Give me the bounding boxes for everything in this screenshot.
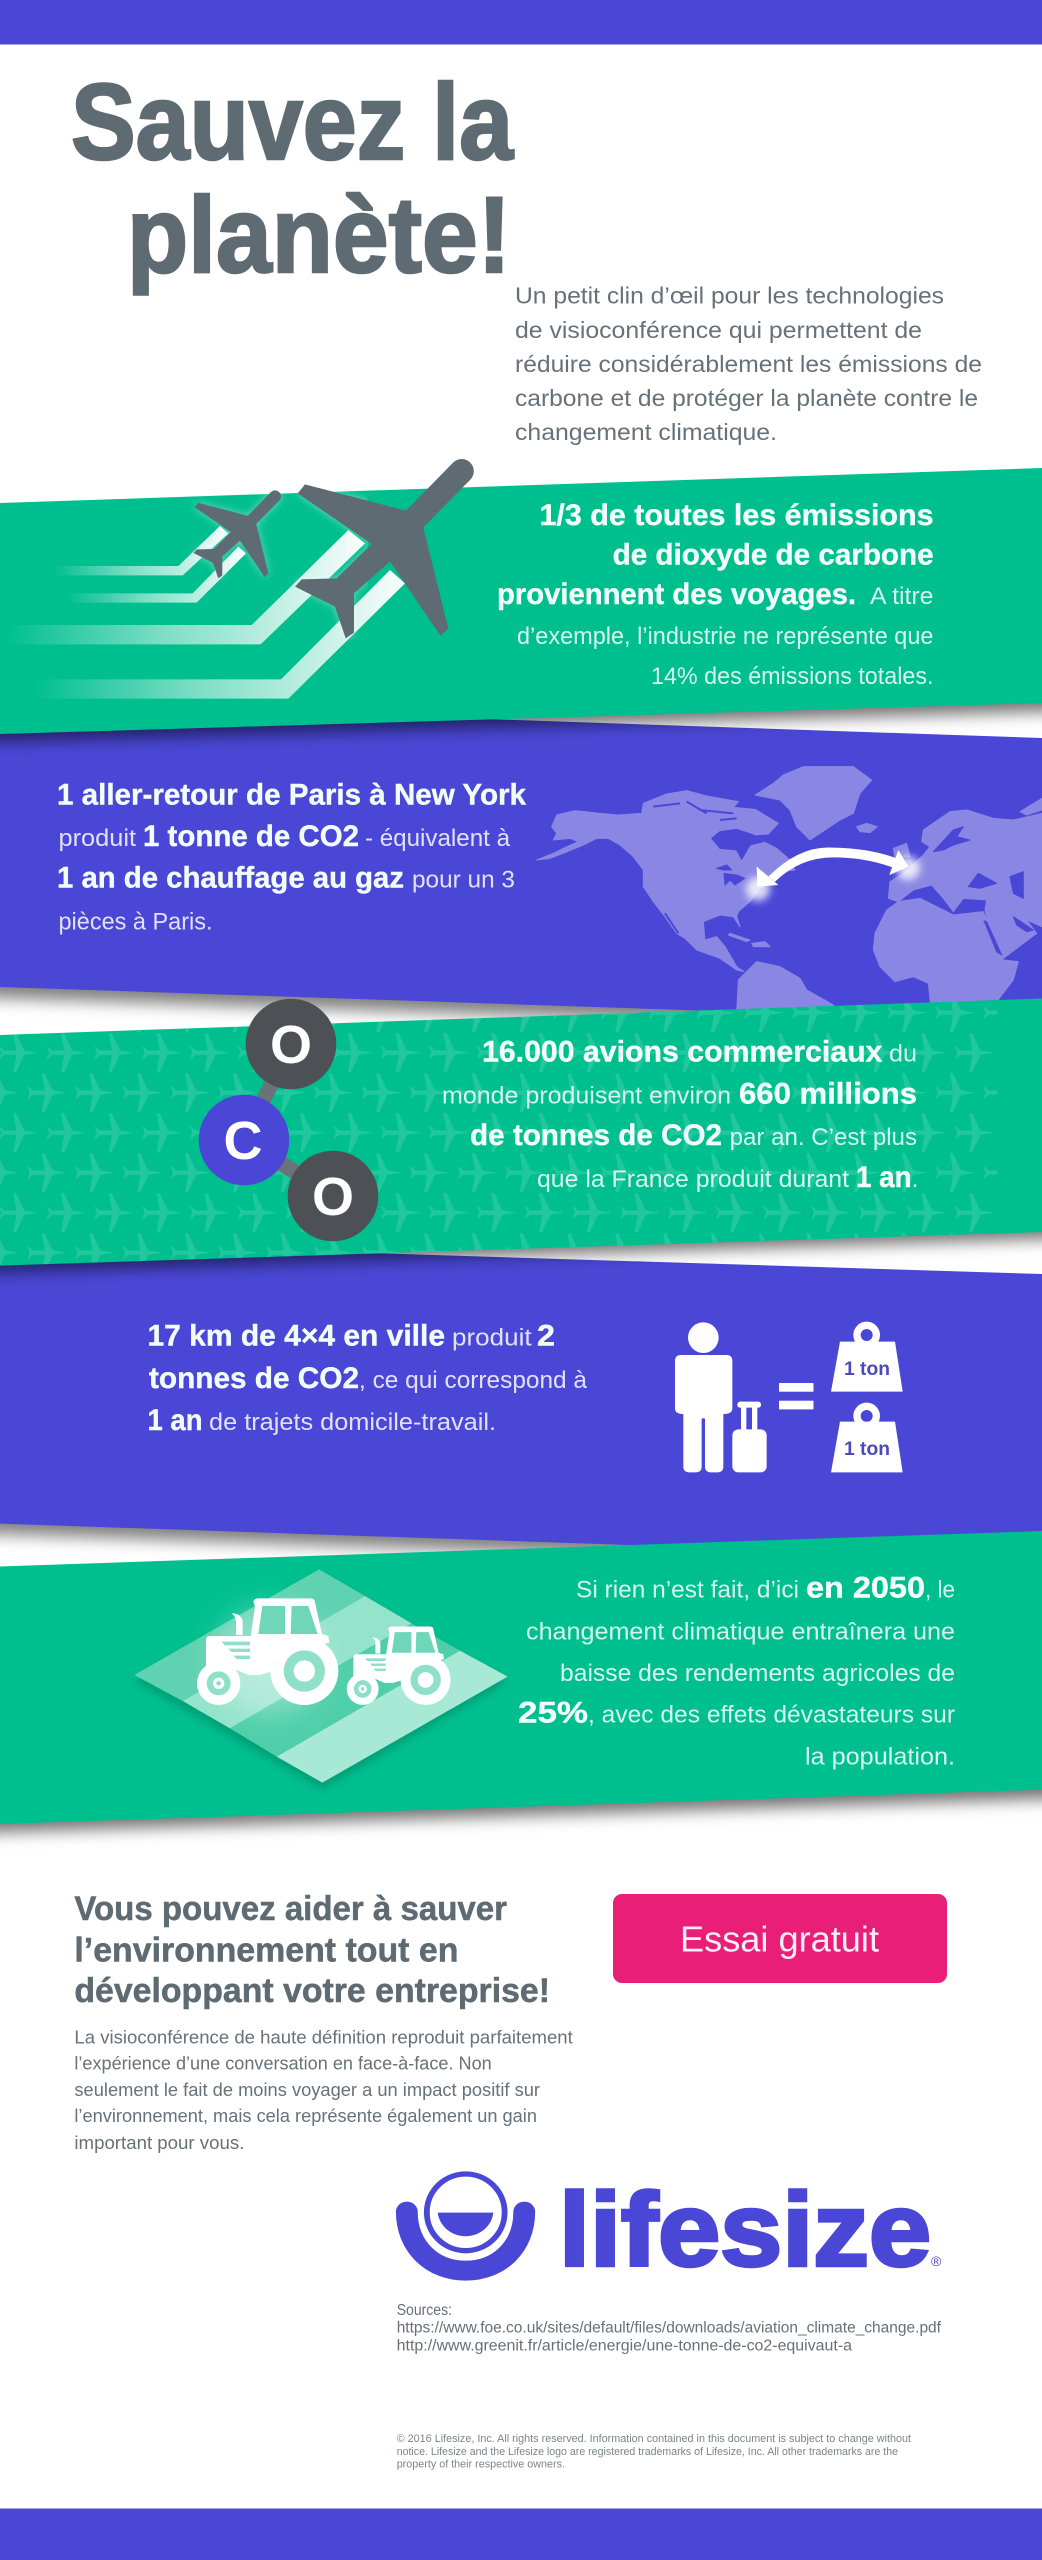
text: commercial aircraft: 1 an	[856, 1161, 912, 1194]
icon: weights 1 ton: 1 ton	[844, 1439, 890, 1460]
text: 4x4: de trajets domicile-travail.	[209, 1409, 496, 1436]
text: videoconference benefits	[74, 2027, 573, 2153]
plane pattern	[0, 993, 997, 1273]
intro text: carbone et de protéger la planète contre le	[515, 385, 978, 411]
copyright: property of their respective owners.	[397, 2459, 565, 2471]
intro text: réduire considérablement les émissions de	[515, 351, 982, 377]
button: free trial: Essai gratuit	[680, 1919, 879, 1960]
text: commercial aircraft: de tonnes de CO2	[470, 1119, 722, 1152]
text: transport emissions: A titre	[870, 583, 934, 610]
icon: weights 1 ton	[831, 1325, 903, 1472]
arrow: round trip	[757, 847, 908, 887]
text: commercial aircraft: par an. C’est plus	[730, 1124, 917, 1151]
text: commercial aircraft: .	[912, 1166, 918, 1193]
text: transport emissions: 14% des émissions totales.	[651, 663, 934, 690]
text: 4x4: 17 km de 4×4 en ville	[148, 1320, 445, 1353]
molecule CO2	[199, 999, 378, 1241]
molecule CO2: O	[312, 1167, 354, 1227]
text: commercial aircraft: 16.000 avions commerciaux	[482, 1036, 883, 1069]
text: 4x4: , ce qui correspond à	[359, 1367, 588, 1394]
bottom bar	[0, 2508, 1042, 2560]
sources	[397, 2302, 942, 2355]
logo: Lifesize: lifesize	[559, 2172, 931, 2288]
text: Paris New York: 1 aller-retour de Paris à New York	[57, 778, 526, 812]
panel: Paris - New York (purple)	[0, 702, 1042, 1035]
text: commercial aircraft: 660 millions	[739, 1078, 917, 1111]
text: 4x4	[148, 1320, 588, 1437]
title: planète!	[127, 174, 511, 295]
copyright: © 2016 Lifesize, Inc. All rights reserved. Information contained in this document is subject to change without	[397, 2433, 911, 2445]
text: transport emissions: d’exemple, l’industrie ne représente que	[517, 623, 934, 650]
icon: planes	[193, 459, 474, 638]
icon: tractors	[197, 1598, 451, 1705]
logo: Lifesize	[407, 2172, 942, 2288]
heading: call to action: développant votre entreprise!	[74, 1972, 550, 2010]
text: videoconference benefits: l’environnement, mais cela représente également un gain	[74, 2106, 537, 2126]
logo: Lifesize: ®	[931, 2253, 942, 2269]
title	[71, 61, 514, 295]
text: Paris New York: pour un 3	[412, 866, 515, 894]
text: 4x4: 2	[537, 1320, 555, 1353]
text: agriculture: , le	[925, 1576, 955, 1604]
icon: person with suitcase	[675, 1322, 767, 1472]
intro text	[515, 282, 982, 445]
text: Paris New York: pièces à Paris.	[58, 909, 212, 936]
diamond field	[134, 1569, 508, 1790]
panel: agriculture (green)	[0, 1531, 1042, 1834]
text: agriculture: 25%	[518, 1697, 588, 1730]
text: commercial aircraft: que la France produit durant	[537, 1166, 849, 1193]
text: Paris New York: produit	[58, 825, 136, 852]
text: agriculture: en 2050	[806, 1572, 925, 1604]
copyright: notice. Lifesize and the Lifesize logo are registered trademarks of Lifesize, Inc. All other trademarks are the	[397, 2446, 898, 2458]
molecule CO2: O	[270, 1015, 312, 1075]
plane glow	[193, 459, 474, 638]
sources: https://www.foe.co.uk/sites/default/files/downloads/aviation_climate_change.pdf	[397, 2320, 942, 2337]
text: videoconference benefits: l’expérience d’une conversation en face-à-face. Non	[74, 2054, 492, 2074]
panel: 4x4 emissions (purple)	[0, 1242, 1042, 1572]
panel: transport emissions (green)	[0, 459, 1042, 743]
text: agriculture: baisse des rendements agricoles de	[560, 1660, 955, 1687]
text: videoconference benefits: seulement le fait de moins voyager a un impact positif sur	[74, 2080, 540, 2100]
text: commercial aircraft: du	[889, 1041, 917, 1068]
glow: New York and Paris	[746, 856, 920, 901]
text: Paris New York: 1 tonne de CO2	[143, 820, 359, 853]
text: Paris New York: 1 an de chauffage au gaz	[57, 862, 404, 894]
intro text: changement climatique.	[515, 419, 777, 445]
title: Sauvez la	[71, 61, 514, 182]
heading: call to action: Vous pouvez aider à sauver	[74, 1890, 507, 1928]
molecule CO2: C	[224, 1111, 262, 1171]
text: videoconference benefits: important pour vous.	[74, 2133, 244, 2153]
text: transport emissions: de dioxyde de carbone	[613, 539, 934, 572]
icon: equals	[779, 1383, 814, 1409]
text: transport emissions: 1/3 de toutes les émissions	[540, 499, 934, 532]
text: videoconference benefits: La visioconférence de haute définition reproduit parfaitement	[74, 2027, 573, 2047]
intro text: de visioconférence qui permettent de	[515, 317, 922, 343]
text: agriculture: changement climatique entraînera une	[526, 1619, 955, 1646]
text: 4x4: 1 an	[148, 1404, 202, 1437]
panel: commercial aircraft (green)	[0, 993, 1042, 1274]
world map	[537, 767, 1042, 1030]
top bar	[0, 0, 1042, 44]
text: transport emissions: proviennent des voyages.	[497, 578, 856, 611]
text: agriculture: , avec des effets dévastateurs sur	[588, 1702, 955, 1729]
text: commercial aircraft: monde produisent environ	[442, 1083, 731, 1110]
text: Paris New York: - équivalent à	[365, 825, 511, 852]
icon: weights 1 ton: 1 ton	[844, 1359, 890, 1380]
text: Paris New York	[57, 778, 526, 936]
text: agriculture	[518, 1572, 955, 1771]
text: 4x4: produit	[452, 1325, 532, 1352]
heading: call to action	[74, 1890, 550, 2010]
sources: http://www.greenit.fr/article/energie/une-tonne-de-co2-equivaut-a	[397, 2338, 852, 2355]
button: free trial	[613, 1894, 947, 1983]
copyright	[397, 2433, 911, 2471]
text: agriculture: la population.	[805, 1744, 955, 1771]
text: transport emissions	[497, 499, 934, 690]
intro text: Un petit clin d’œil pour les technologies	[515, 282, 944, 308]
text: 4x4: tonnes de CO2	[149, 1362, 359, 1395]
contrails	[7, 526, 405, 699]
text: agriculture: Si rien n’est fait, d’ici	[576, 1576, 799, 1604]
text: commercial aircraft	[442, 1036, 918, 1194]
sources: Sources:	[397, 2302, 452, 2319]
heading: call to action: l’environnement tout en	[74, 1932, 458, 1970]
